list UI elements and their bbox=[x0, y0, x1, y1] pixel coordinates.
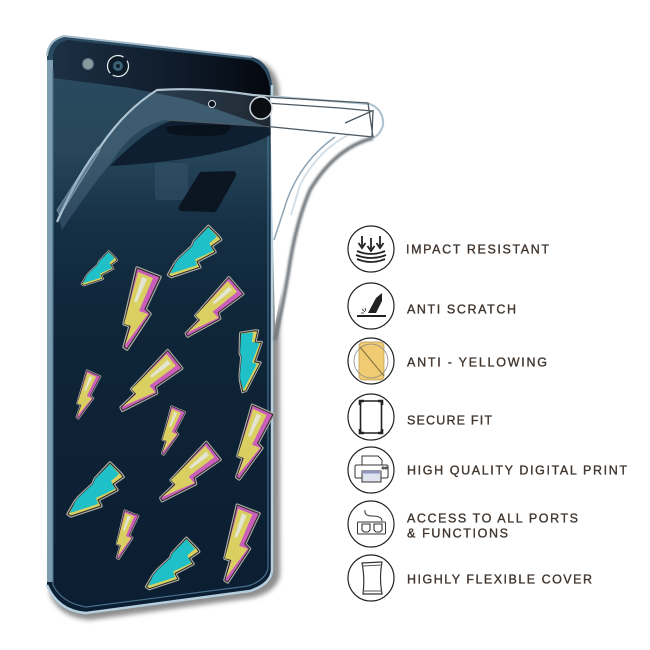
feature: impact resistant bbox=[348, 226, 549, 272]
case flap bbox=[57, 89, 383, 340]
camera lens bbox=[108, 56, 128, 76]
feature: ports access: ACCESS TO ALL PORTS bbox=[407, 512, 578, 526]
sensor frame bbox=[155, 163, 188, 200]
feature: anti scratch bbox=[348, 283, 516, 329]
flap shadow bbox=[110, 120, 272, 166]
case white flare bbox=[270, 97, 382, 325]
phone body bbox=[47, 36, 273, 614]
case edge strip bbox=[47, 60, 53, 582]
feature: impact resistant: IMPACT RESISTANT bbox=[406, 242, 549, 256]
camera cutout bbox=[250, 97, 272, 119]
feature: secure fit: SECURE FIT bbox=[407, 414, 492, 428]
feature: digital print bbox=[348, 447, 627, 493]
side button bbox=[57, 147, 100, 215]
speaker slot bbox=[165, 125, 231, 136]
mic hole bbox=[208, 100, 216, 108]
feature: anti yellowing bbox=[348, 338, 547, 384]
case curve shadow bbox=[275, 138, 373, 340]
feature: flexible cover: HIGHLY FLEXIBLE COVER bbox=[407, 572, 592, 586]
phone with clear case bbox=[47, 36, 383, 620]
feature: ports access: & FUNCTIONS bbox=[407, 526, 508, 540]
feature: digital print: HIGH QUALITY DIGITAL PRINT bbox=[407, 464, 627, 478]
phone top dark band bbox=[53, 40, 270, 128]
flap inner edges bbox=[167, 97, 373, 137]
flap tint bbox=[58, 90, 272, 230]
flash bbox=[82, 58, 94, 70]
phone shadow bbox=[50, 50, 280, 620]
fingerprint sensor bbox=[178, 171, 236, 212]
feature: flexible cover bbox=[348, 555, 592, 601]
feature: anti yellowing: ANTI - YELLOWING bbox=[407, 356, 547, 370]
flap outer edge bbox=[57, 89, 383, 222]
feature: ports access bbox=[348, 501, 578, 547]
bolts bbox=[68, 226, 281, 589]
feature: secure fit bbox=[348, 394, 492, 440]
feature: anti scratch: ANTI SCRATCH bbox=[407, 302, 516, 316]
